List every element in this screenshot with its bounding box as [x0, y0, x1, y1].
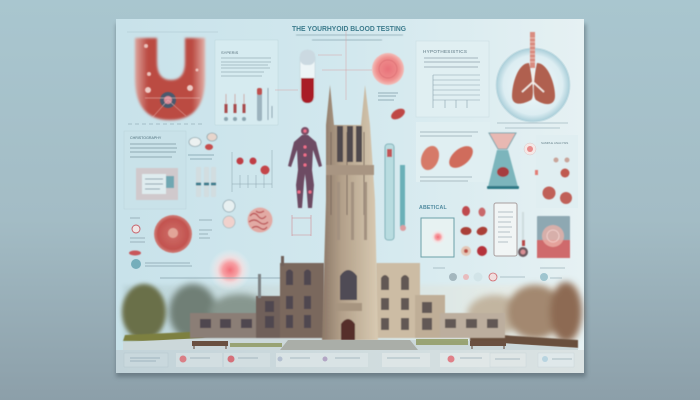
sky	[123, 285, 578, 340]
pavement	[123, 338, 578, 350]
text lines	[424, 58, 480, 67]
lower right small icons	[433, 268, 565, 282]
small diagram under body	[292, 215, 311, 236]
tower window	[340, 270, 357, 300]
icon: kidney beans	[418, 143, 442, 173]
icon: clipboard with target	[421, 218, 454, 257]
mini dashboard	[136, 168, 178, 200]
heading: HYPOTHESISTICS	[423, 49, 467, 54]
text lines	[420, 132, 478, 181]
thermometer tubes	[385, 144, 406, 240]
right wing	[376, 263, 505, 338]
subtitle	[296, 35, 403, 40]
icon: probe	[518, 212, 528, 257]
left wing	[190, 256, 324, 338]
panel: left text and chart	[124, 131, 186, 209]
caption under lungs	[497, 123, 568, 128]
title block	[292, 26, 407, 40]
icon: red pill	[389, 106, 407, 122]
icon: red disc	[154, 215, 192, 253]
panel: red specimens	[416, 122, 490, 182]
icons: vials	[224, 88, 272, 121]
icon: gauges	[223, 200, 235, 228]
panel: hypothesis chart	[416, 41, 489, 117]
caption under dishes	[188, 155, 214, 159]
icon: clipboard document	[494, 203, 517, 256]
lawns	[123, 332, 205, 341]
trees left	[169, 284, 270, 340]
icon: hourglass flask	[487, 133, 519, 189]
title: THE YOURHYOID BLOOD TESTING	[292, 26, 407, 33]
board	[116, 19, 584, 373]
heading: abstract: ABETICAL	[419, 205, 447, 211]
label below ring	[378, 93, 398, 100]
footer items	[124, 353, 574, 367]
axis caption under organ	[128, 123, 205, 125]
chart: red dots	[232, 150, 272, 192]
left side caption and icon	[130, 218, 212, 242]
icon: tablet	[537, 216, 570, 258]
icons: red droplets	[460, 206, 489, 256]
tower door	[341, 319, 355, 340]
icon: red pill left	[129, 250, 141, 256]
glowing target	[209, 249, 251, 291]
icon: test tube	[300, 50, 315, 103]
heading: SYPERIS	[221, 50, 239, 55]
label: SAMPLE ANALYSIS	[541, 141, 568, 145]
icon: lungs in circle	[496, 32, 570, 122]
text lines	[130, 144, 177, 157]
icon: central node	[144, 44, 200, 118]
icon: capsule	[524, 143, 536, 155]
icon: human body figure	[288, 127, 322, 208]
benches	[192, 341, 506, 349]
icon: pink ring target	[372, 53, 404, 85]
caption lines	[145, 263, 300, 278]
icon: petri dishes	[189, 133, 217, 150]
icon: brain	[246, 206, 274, 234]
connector lines	[275, 30, 372, 100]
panel: upper text and vials	[215, 40, 278, 125]
icon: U organ	[135, 38, 205, 120]
steps	[280, 340, 418, 350]
panel: specimens right	[524, 135, 578, 208]
main tower	[322, 85, 378, 340]
trees right	[467, 282, 582, 342]
panel: landscape and building	[122, 85, 582, 350]
panel: U-shaped organ	[127, 32, 218, 120]
board shadow	[116, 24, 586, 377]
icon: teal badge	[131, 259, 141, 269]
icon: tube rack	[196, 167, 216, 197]
text lines	[221, 58, 271, 76]
footer strip	[116, 350, 584, 373]
chart	[433, 75, 480, 108]
heading: CHRISTOGRAPHY	[130, 136, 162, 140]
